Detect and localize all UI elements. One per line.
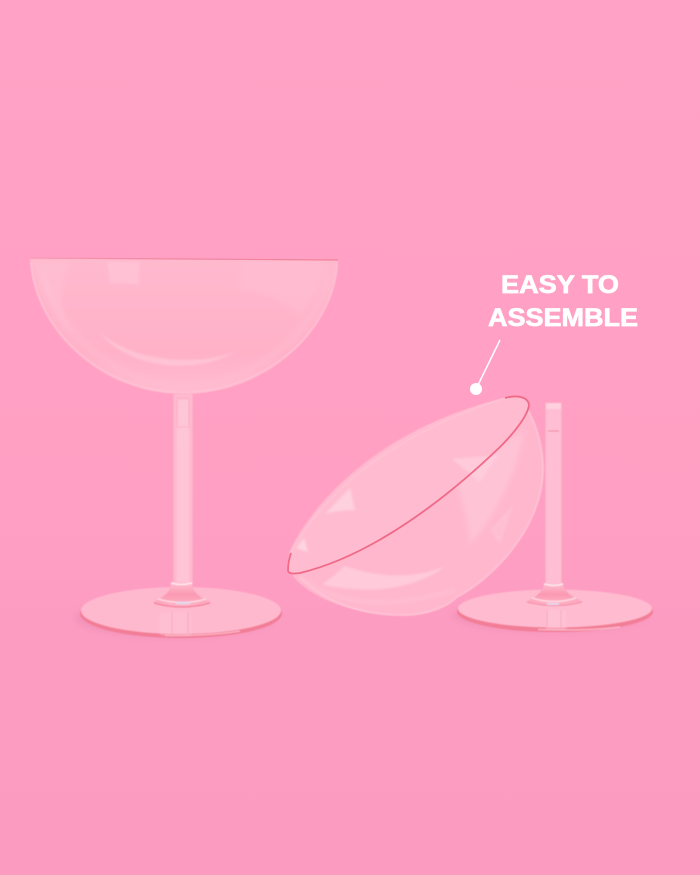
left glass: rim — [30, 258, 338, 260]
right glass: stem foot — [527, 583, 582, 606]
right glass: base — [457, 590, 653, 632]
callout text — [488, 271, 638, 332]
right disassembled glass parts — [288, 396, 653, 632]
callout leader line — [478, 340, 500, 385]
left glass: base — [80, 587, 282, 638]
right glass: front rim — [288, 396, 529, 574]
right glass: bowl interior — [288, 396, 529, 574]
left glass: stem foot — [153, 582, 211, 607]
right glass: tipped bowl — [288, 396, 543, 615]
callout text: ASSEMBLE — [488, 304, 638, 332]
left glass: bowl — [30, 258, 338, 394]
left glass: base shadow — [74, 598, 274, 638]
callout: easy to assemble — [470, 271, 638, 395]
callout dot — [470, 383, 482, 395]
left assembled coupe glass — [30, 258, 338, 638]
right glass: back rim — [290, 398, 505, 553]
left glass: stem — [173, 394, 193, 584]
callout text: EASY TO — [501, 271, 619, 299]
right base shadow — [452, 600, 648, 632]
right glass: stem — [545, 403, 562, 584]
